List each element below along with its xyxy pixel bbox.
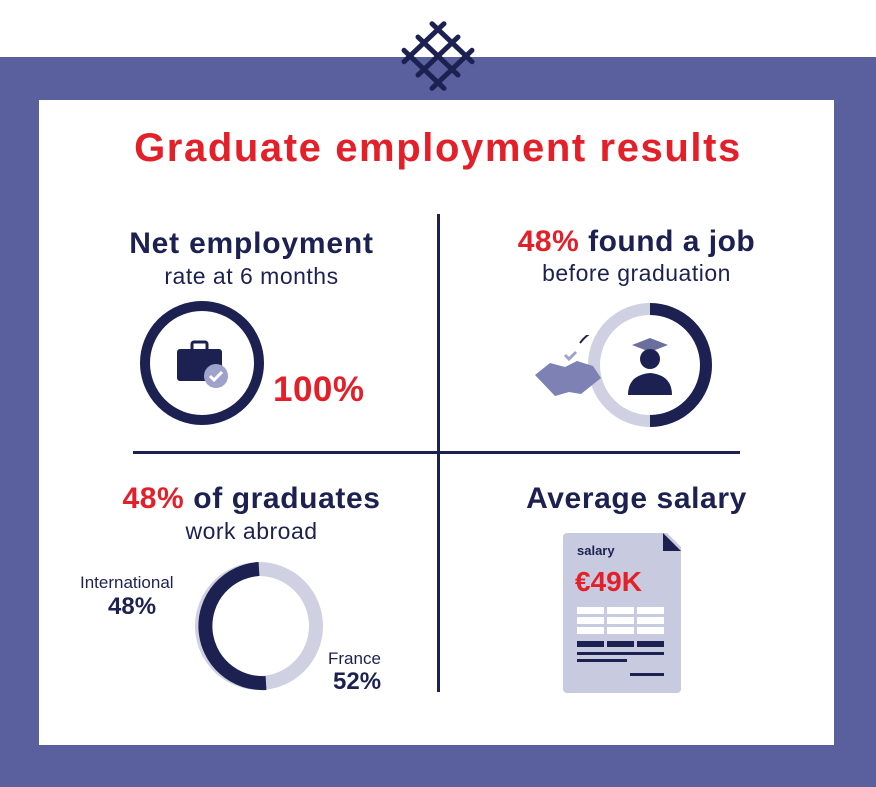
chart: ring 48% [588,303,712,427]
heading: Net employment [129,227,374,260]
panel: work abroad [80,482,381,695]
value: 100% [273,370,365,409]
panel: salary [526,482,747,693]
panel: work abroad: France [328,649,381,668]
donut chart [195,562,323,690]
panel: found job: before graduation [542,260,731,286]
heading: 48% found a job [518,225,755,258]
legend: International [80,573,174,592]
heading: Average salary [526,482,747,515]
heading: 48% of graduates [122,482,381,515]
logo [402,21,474,91]
panel: found job [518,225,755,427]
panel: work abroad: 48% [108,593,156,620]
panel: net employment: rate at 6 months [164,263,339,289]
panel: net employment [129,227,374,425]
icon: salary document [563,533,681,693]
title: Graduate employment results [134,126,742,170]
panel: work abroad: 52% [333,668,381,695]
icon: handshake [535,335,601,396]
dividers [437,214,440,692]
panel: work abroad: work abroad [185,518,318,544]
icon: briefcase ring [140,301,264,425]
icon: salary document: salary [577,543,615,558]
icon: salary document: €49K [575,566,642,597]
